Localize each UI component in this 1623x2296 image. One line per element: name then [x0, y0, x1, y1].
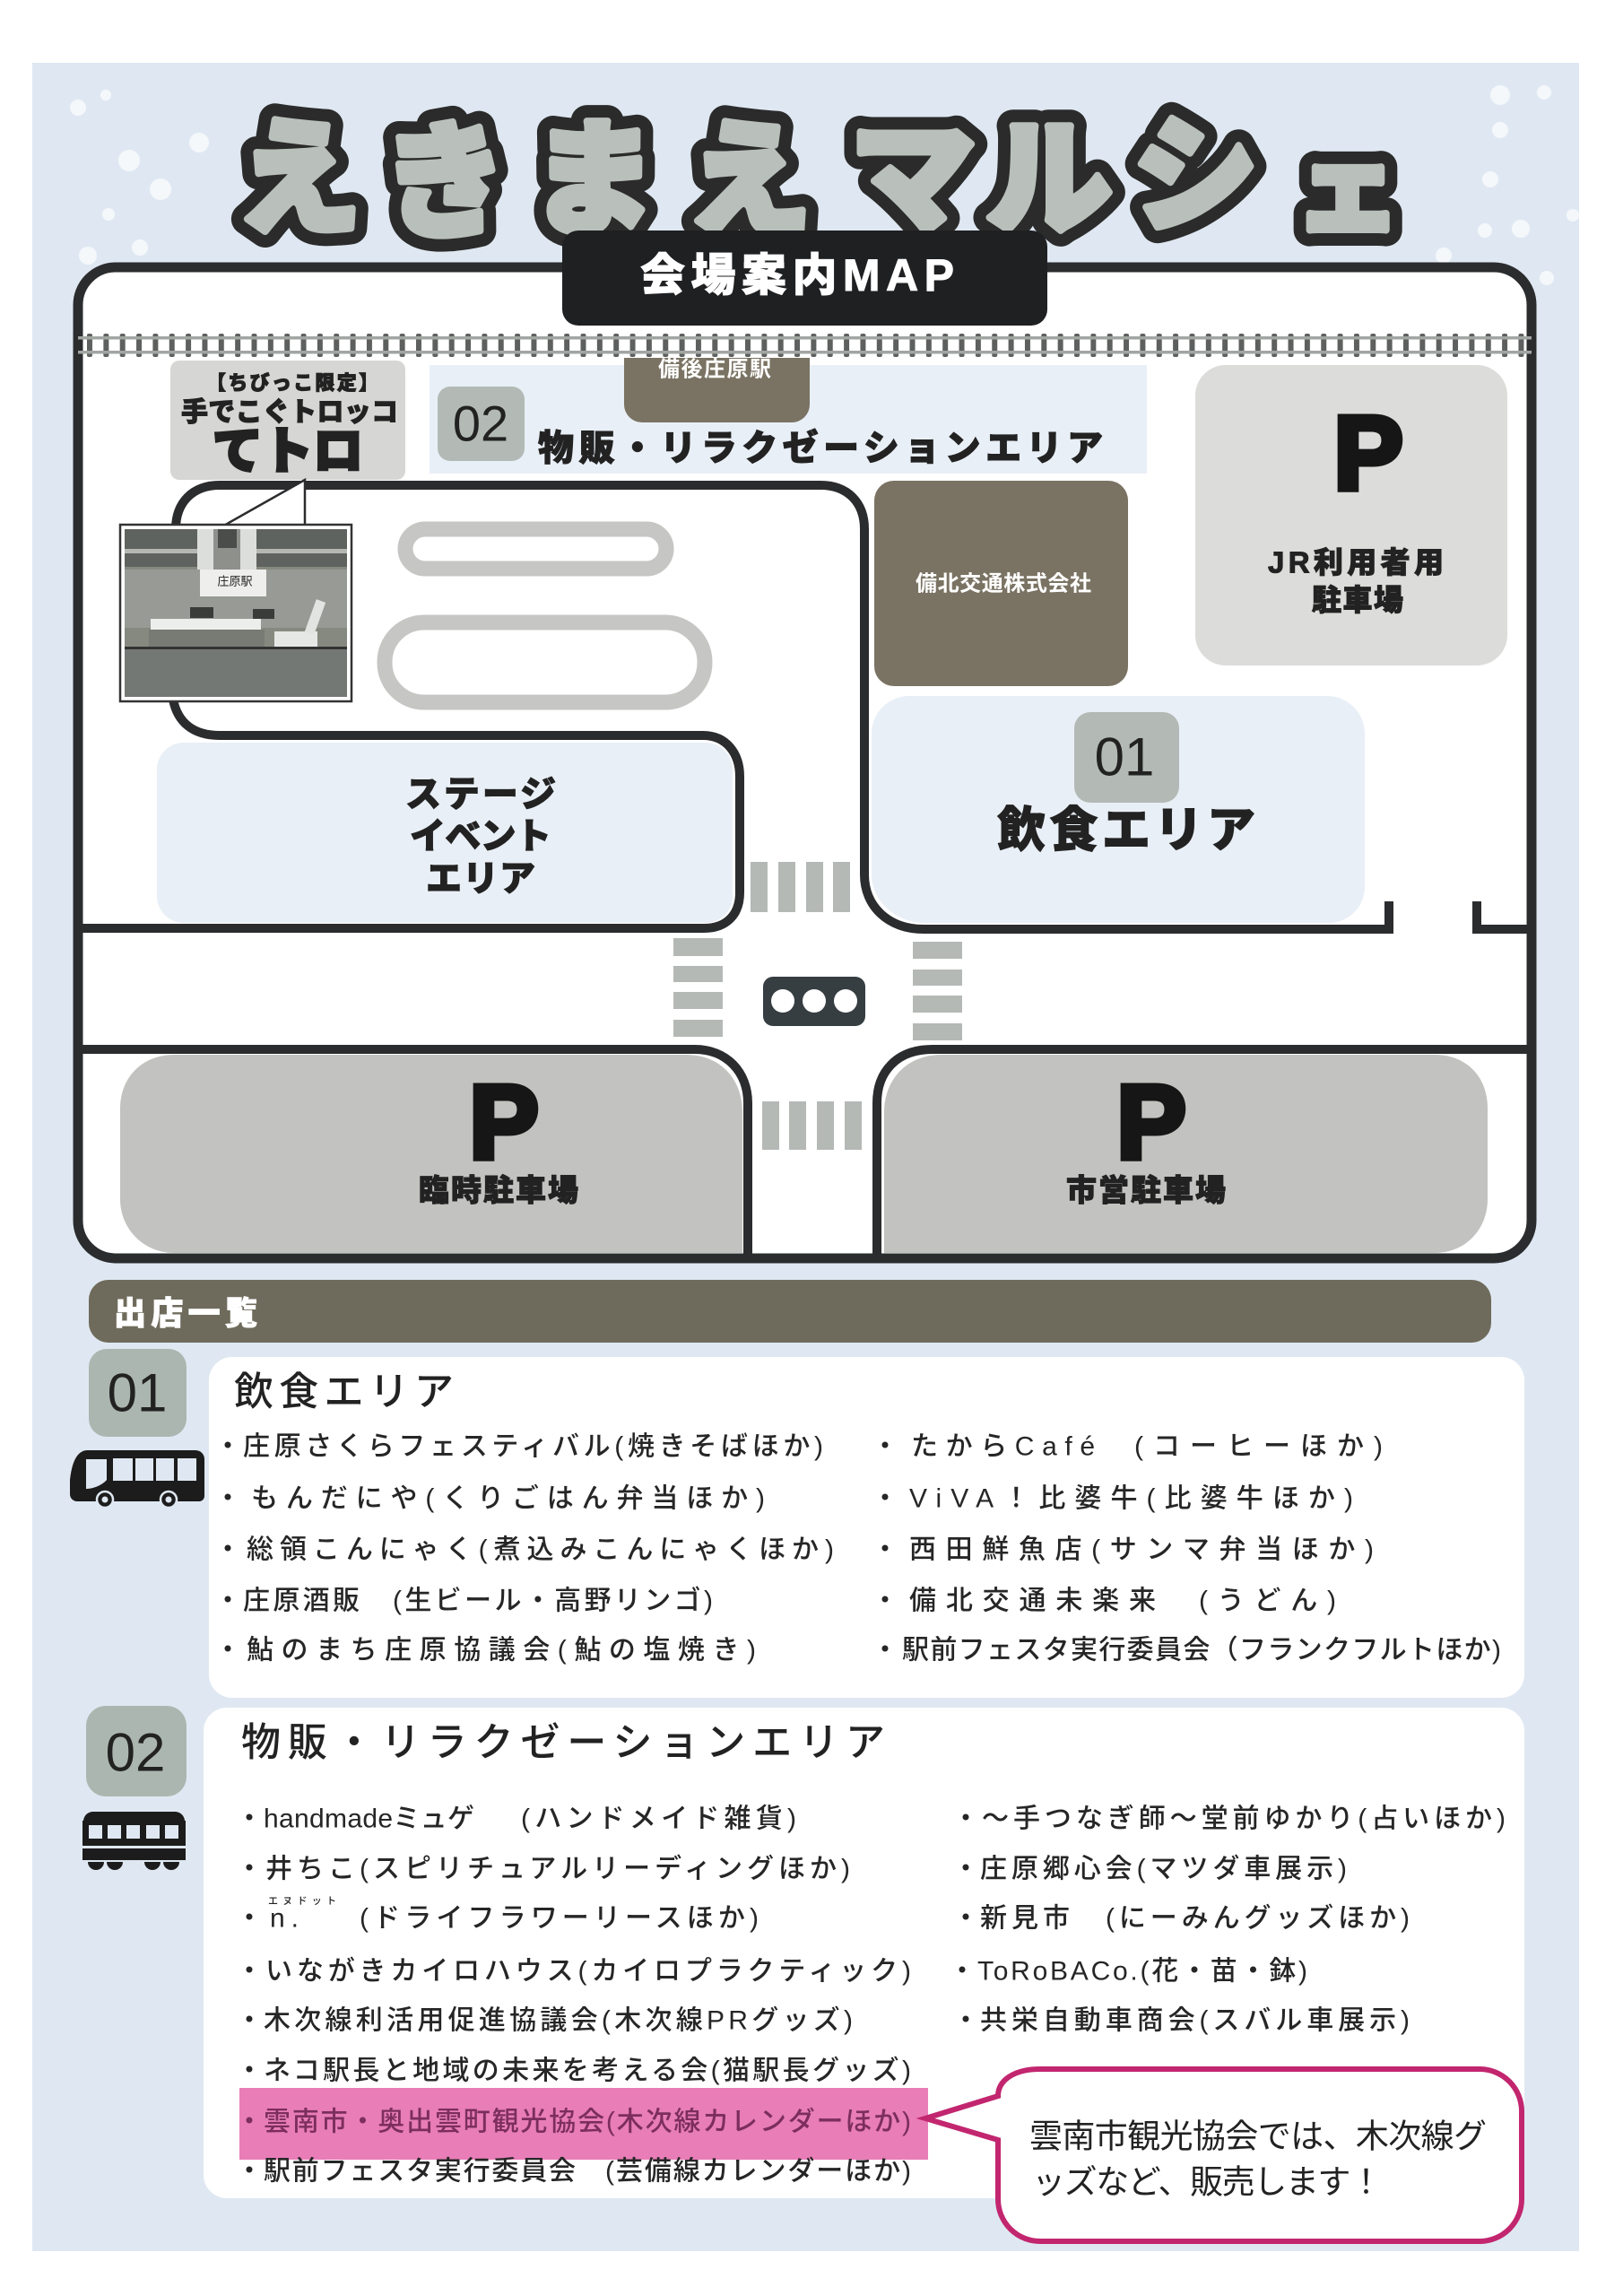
title: えきまえマルシェ — [236, 106, 1401, 257]
left column: ・ — [214, 1483, 241, 1514]
right column: ・ — [952, 1903, 979, 1934]
left column — [236, 1805, 911, 2187]
left column: ・ — [236, 2056, 263, 2086]
map frame — [78, 267, 1532, 1258]
left column: 庄原酒販 — [243, 1586, 360, 1616]
area panel: 01 飲食エリア — [872, 696, 1365, 923]
parking: 臨時駐車場: P — [469, 1064, 539, 1180]
left column: いながきカイロハウス(カイロプラクティック) — [265, 1957, 911, 1986]
title: えきまえマルシェ: シ — [1133, 106, 1258, 246]
roads — [78, 485, 1532, 1257]
callout: ッズなど、販売します！ — [1032, 2163, 1383, 2201]
title: えきまえマルシェ: え — [236, 109, 361, 249]
right column: 西田鮮魚店(サンマ弁当ほか) — [909, 1535, 1374, 1564]
number tile 01: 01 — [108, 1363, 167, 1422]
title: えきまえマルシェ: き — [378, 109, 513, 257]
panel: 物販・リラクゼーションエリア list — [204, 1708, 1524, 2198]
left column: 鮎のまち庄原協議会(鮎の塩焼き) — [247, 1636, 756, 1665]
left column: ・ — [214, 1586, 241, 1616]
title: えきまえマルシェ: え — [686, 111, 812, 251]
panel: 飲食エリア list — [209, 1357, 1524, 1698]
left column: ・ — [236, 1855, 263, 1883]
parking: 市営駐車場: P — [1116, 1064, 1186, 1180]
title: えきまえマルシェ: シ — [1133, 106, 1258, 246]
right column: ・ — [952, 1805, 979, 1833]
title: えきまえマルシェ: ま — [531, 109, 656, 251]
left column: ・ — [236, 1957, 263, 1986]
left column: (芸備線カレンダーほか) — [605, 2156, 911, 2187]
stage event area: エリア — [426, 859, 535, 899]
tetoro sign — [170, 361, 405, 480]
railway track — [78, 334, 1532, 357]
right column: ・ — [952, 2005, 979, 2036]
area panel: 02 — [430, 365, 1147, 474]
right column: 備北交通未楽来 — [909, 1586, 1156, 1616]
heading badge: 会場案内MAP: 会場案内MAP — [640, 250, 954, 300]
callout — [925, 2069, 1522, 2241]
stage event area: イベント — [410, 817, 551, 857]
parking: 臨時駐車場 — [120, 1055, 742, 1253]
left column: 雲南市・奥出雲町観光協会(木次線カレンダーほか) — [264, 2108, 911, 2136]
left column: ・ — [236, 2156, 263, 2187]
left column: ・ — [236, 1903, 263, 1934]
title: えきまえマルシェ: ル — [986, 109, 1112, 249]
right column — [949, 1805, 1506, 2036]
station: 備後庄原駅 — [624, 357, 810, 422]
parking: JR利用者用駐車場 — [1195, 365, 1507, 665]
parking: JR利用者用駐車場: 駐車場 — [1312, 583, 1403, 617]
left column: (ドライフラワーリースほか) — [360, 1903, 759, 1934]
left column: 総領こんにゃく(煮込みこんにゃくほか) — [247, 1535, 834, 1564]
parking: JR利用者用駐車場: JR利用者用 — [1268, 545, 1444, 579]
right column: ViVA！比婆牛(比婆牛ほか) — [909, 1483, 1353, 1514]
parking: 市営駐車場 — [884, 1055, 1488, 1253]
callout: 雲南市観光協会では、木次線グ — [1029, 2118, 1487, 2154]
number tile 02: 02 — [106, 1722, 165, 1783]
tetoro sign: てトロ — [213, 423, 363, 479]
highlight band — [239, 2088, 928, 2160]
right column: ・ — [872, 1431, 898, 1462]
tetoro sign: 手でこぐトロッコ — [181, 398, 398, 427]
number tile 02 — [438, 387, 525, 461]
number tile 02: 02 — [453, 395, 508, 452]
right column: ・ — [872, 1535, 898, 1564]
number tile 02 — [86, 1706, 187, 1796]
number tile 01 — [89, 1349, 187, 1437]
station: 備後庄原駅: 備後庄原駅 — [658, 357, 771, 382]
left column: ・ — [236, 2005, 263, 2036]
left column — [214, 1431, 834, 1665]
left column: 駅前フェスタ実行委員会 — [264, 2156, 576, 2187]
building: 備北交通株式会社: 備北交通株式会社 — [916, 572, 1091, 596]
left column: ・ — [236, 1805, 263, 1833]
right column: ・ — [872, 1586, 898, 1616]
left column: ・ — [214, 1636, 241, 1665]
right column: ・ — [949, 1957, 976, 1986]
title: えきまえマルシェ: き — [378, 109, 513, 257]
right column: ・ — [872, 1483, 898, 1514]
right column: ToRoBACo.(花・苗・鉢) — [977, 1957, 1307, 1986]
title: えきまえマルシェ: ま — [531, 109, 656, 251]
tetoro sign: 【ちびっこ限定】 — [206, 371, 378, 395]
left column: エヌドット — [268, 1896, 336, 1907]
right column: (コーヒーほか) — [1134, 1431, 1383, 1462]
left column: ネコ駅長と地域の未来を考える会(猫駅長グッズ) — [264, 2056, 911, 2086]
heading badge: 会場案内MAP — [562, 230, 1047, 326]
title: えきまえマルシェ: え — [236, 109, 361, 249]
building: 備北交通株式会社 — [874, 481, 1128, 686]
icon: train car — [82, 1812, 186, 1870]
icon: bus — [70, 1450, 204, 1508]
title: えきまえマルシェ: ル — [986, 109, 1112, 249]
right column — [872, 1431, 1501, 1665]
title: えきまえマルシェ: ェ — [1295, 131, 1401, 249]
left column: (生ビール・高野リンゴ) — [393, 1586, 713, 1616]
track ovals — [385, 529, 705, 702]
parking: 市営駐車場: 市営駐車場 — [1066, 1174, 1226, 1208]
left column: 木次線利活用促進協議会(木次線PRグッズ) — [264, 2005, 853, 2036]
right column: ・ — [872, 1636, 898, 1665]
left column: もんだにや(くりごはん弁当ほか) — [251, 1483, 765, 1514]
left column: ・ — [214, 1535, 241, 1564]
stage event area: ステージ — [405, 775, 556, 814]
number tile 01: 01 — [1095, 726, 1154, 787]
area label: 飲食エリア — [997, 804, 1255, 857]
number tile 01 — [1074, 712, 1179, 803]
right column: 新見市 — [980, 1903, 1070, 1934]
right column: (にーみんグッズほか) — [1106, 1903, 1410, 1934]
stage event area — [157, 743, 733, 923]
title: えきまえマルシェ: ェ — [1295, 131, 1401, 249]
parking: 臨時駐車場: 臨時駐車場 — [419, 1174, 578, 1208]
right column: 共栄自動車商会(スバル車展示) — [980, 2005, 1410, 2036]
left column: handmadeミュゲ — [264, 1805, 474, 1833]
right column: ～手つなぎ師～堂前ゆかり(占いほか) — [982, 1805, 1506, 1833]
left column: ・ — [236, 2108, 263, 2136]
right column: 庄原郷心会(マツダ車展示) — [980, 1855, 1347, 1883]
title: えきまえマルシェ: マ — [850, 109, 976, 249]
title: えきまえマルシェ: マ — [850, 109, 976, 249]
section bar: 出店一覧: 出店一覧 — [114, 1295, 257, 1331]
crosswalks — [673, 862, 962, 1150]
photo of tetoro — [120, 480, 352, 701]
heading: 飲食エリア — [234, 1370, 454, 1413]
photo of tetoro: 庄原駅 — [217, 574, 253, 588]
area label: 物販・リラクゼーションエリア: 物販・リラクゼーションエリア — [538, 428, 1103, 468]
title: えきまえマルシェ: え — [686, 111, 812, 251]
right column: ・ — [952, 1855, 979, 1883]
right column: (うどん) — [1199, 1586, 1336, 1616]
right column: 駅前フェスタ実行委員会（フランクフルトほか) — [902, 1636, 1501, 1665]
right column: たからCafé — [911, 1431, 1095, 1462]
parking: JR利用者用駐車場: P — [1333, 395, 1403, 511]
left column: (ハンドメイド雑貨) — [521, 1805, 796, 1833]
section bar: 出店一覧 — [89, 1280, 1491, 1343]
heading: 物販・リラクゼーションエリア — [241, 1720, 885, 1765]
left column: n. — [270, 1903, 299, 1934]
left column: 井ちこ(スピリチュアルリーディングほか) — [265, 1855, 850, 1883]
left column: 庄原さくらフェスティバル(焼きそばほか) — [243, 1431, 823, 1462]
left column: ・ — [214, 1431, 241, 1462]
traffic light — [763, 977, 865, 1026]
